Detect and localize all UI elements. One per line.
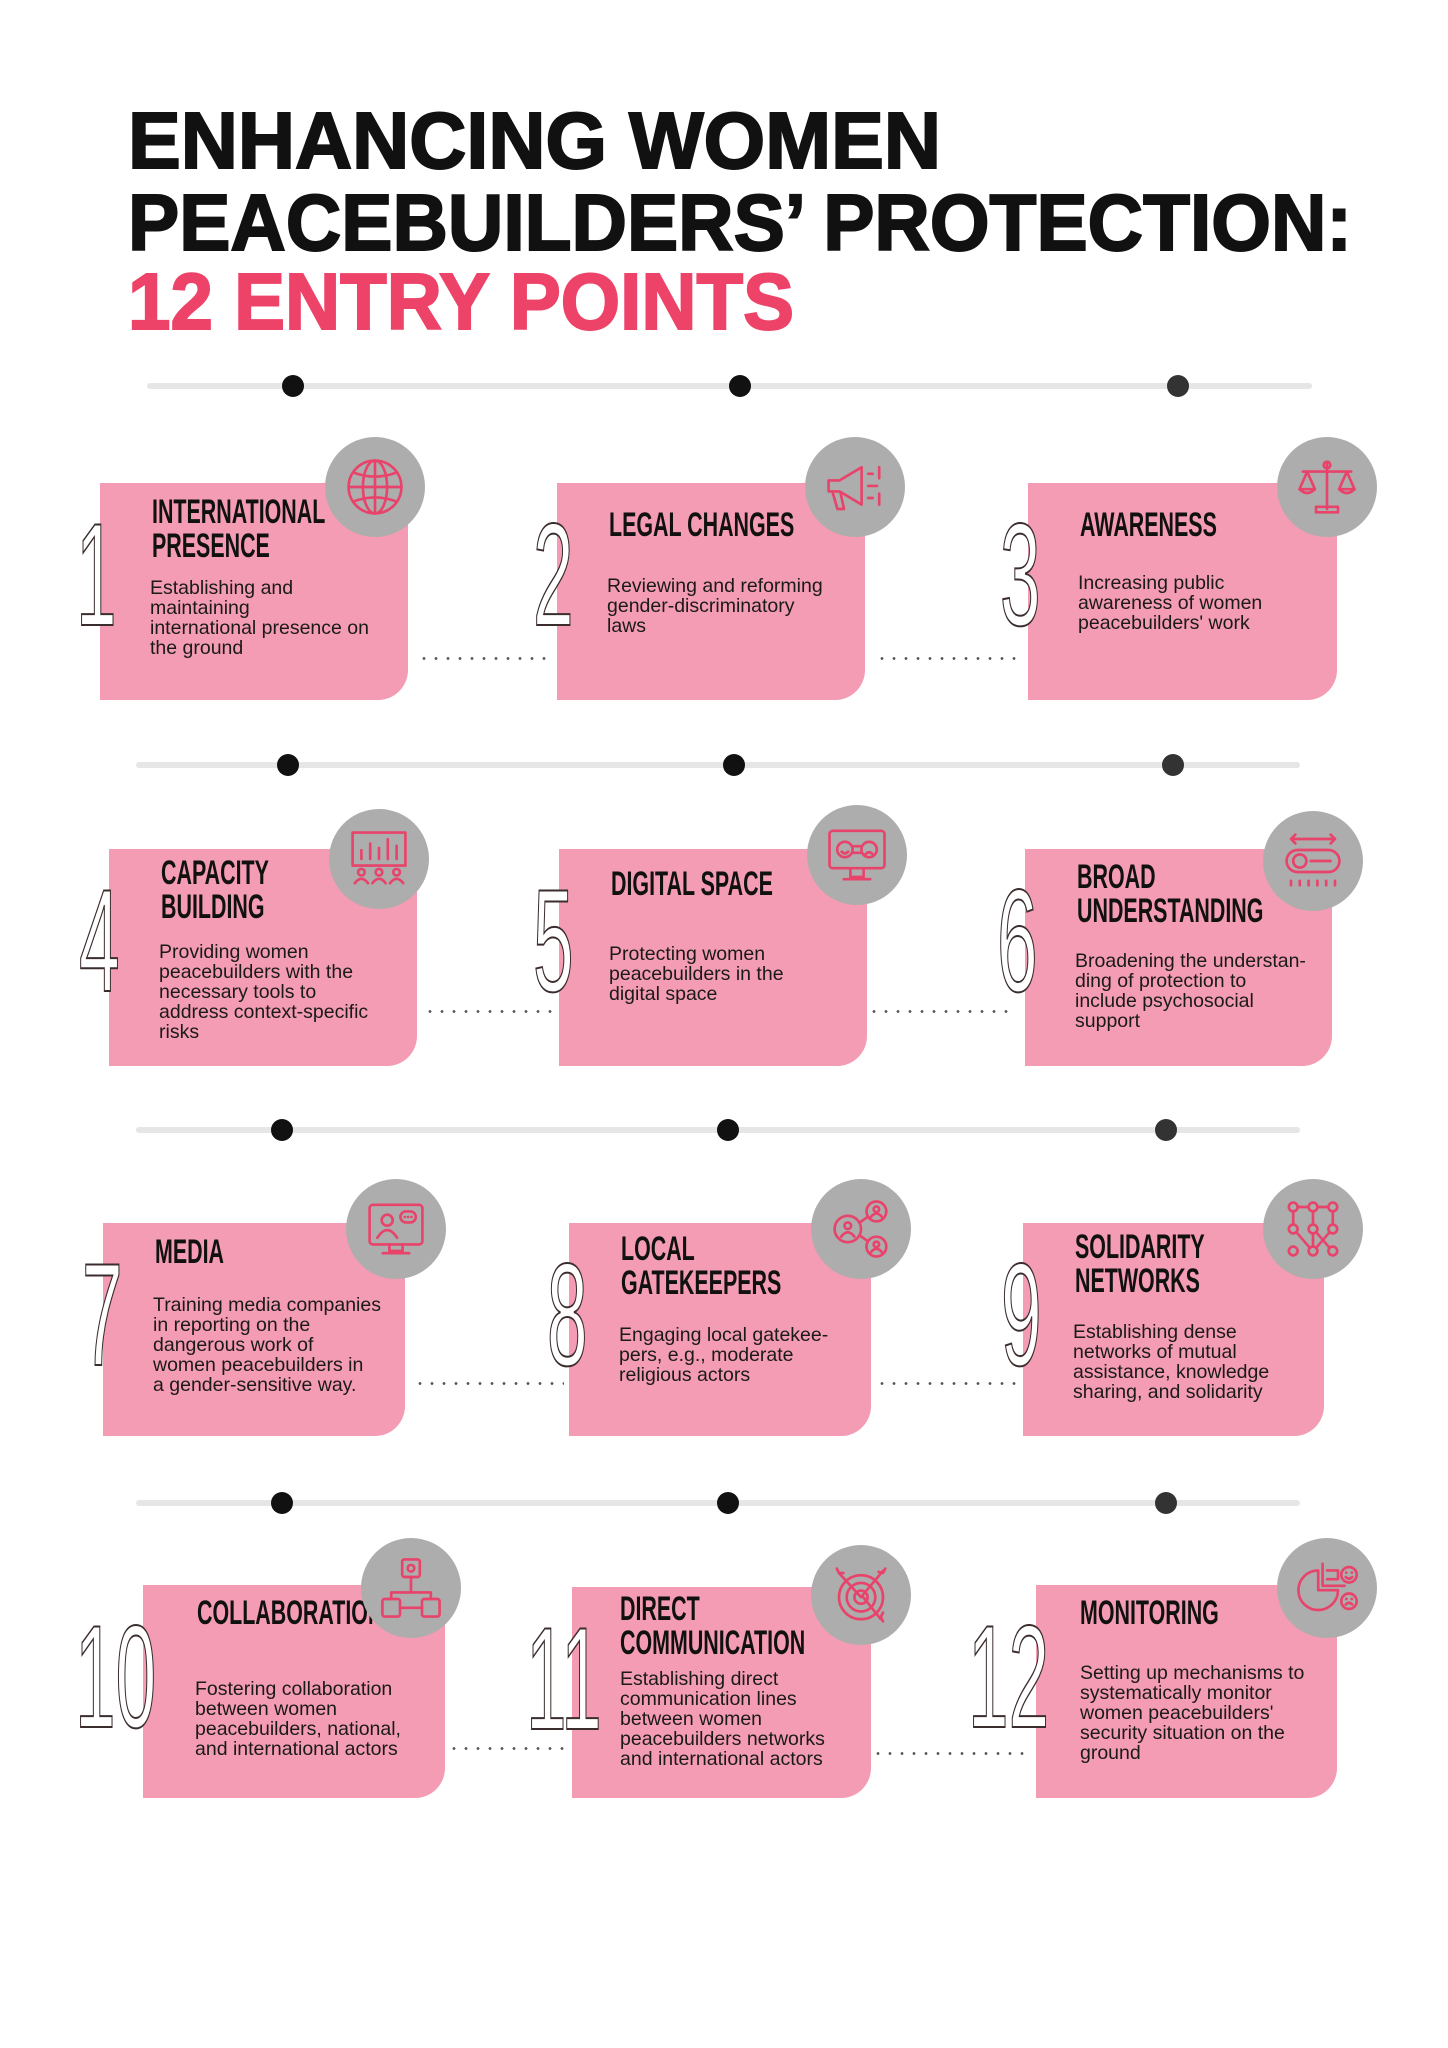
icon: collaboration diagram [361, 1538, 461, 1638]
card 7: media [82, 1179, 446, 1436]
heading: DIRECT [620, 1590, 700, 1628]
text: sharing, and solidarity [1073, 1381, 1263, 1403]
number 7: 7 [82, 1233, 123, 1396]
card 3: awareness [1000, 437, 1377, 700]
text: religious actors [619, 1364, 750, 1386]
text: maintaining [150, 597, 250, 619]
icon: toggle [1263, 811, 1363, 911]
text: peacebuilders' work [1078, 612, 1250, 634]
text: assistance, knowledge [1073, 1361, 1269, 1383]
number 12: 12 [968, 1595, 1049, 1758]
heading: LEGAL CHANGES [609, 506, 794, 544]
heading: DIGITAL SPACE [611, 865, 773, 903]
heading: INTERNATIONAL [152, 493, 325, 531]
icon: megaphone [805, 437, 905, 537]
title: ENHANCING WOMEN [128, 96, 941, 185]
heading [620, 1590, 805, 1662]
heading: AWARENESS [1080, 506, 1217, 544]
text: include psychosocial [1075, 990, 1254, 1012]
card 4: capacity building [79, 809, 429, 1066]
text: the ground [150, 637, 243, 659]
text: Establishing and [150, 577, 293, 599]
text [1075, 950, 1306, 1032]
card 9: solidarity networks [1001, 1179, 1363, 1436]
text: international presence on [150, 617, 369, 639]
text [1078, 572, 1262, 634]
text: Establishing dense [1073, 1321, 1237, 1343]
text: Establishing direct [620, 1668, 778, 1690]
number 10: 10 [75, 1595, 156, 1758]
icon: presentation [329, 809, 429, 909]
text: Increasing public [1078, 572, 1224, 594]
text: communication lines [620, 1688, 797, 1710]
text: laws [607, 615, 646, 637]
text: women peacebuilders in [153, 1354, 363, 1376]
text [607, 575, 823, 637]
text: awareness of women [1078, 592, 1262, 614]
card 8: local gatekeepers [547, 1179, 911, 1436]
text [619, 1324, 828, 1386]
number 2: 2 [533, 493, 574, 656]
number 5: 5 [533, 859, 574, 1022]
card 6: broad understanding [997, 811, 1363, 1066]
text [195, 1678, 401, 1760]
heading: COMMUNICATION [620, 1624, 805, 1662]
text: Engaging local gatekee- [619, 1324, 828, 1346]
text: Training media companies [153, 1294, 381, 1316]
text: peacebuilders with the [159, 961, 353, 983]
number 8: 8 [547, 1233, 588, 1396]
icon: scales [1277, 437, 1377, 537]
icon: people network [811, 1179, 911, 1279]
card 2: legal changes [533, 437, 905, 700]
text: and international actors [195, 1738, 398, 1760]
icon: media monitor [346, 1179, 446, 1279]
text: risks [159, 1021, 199, 1043]
heading: NETWORKS [1075, 1262, 1200, 1300]
card 12: monitoring [968, 1538, 1377, 1798]
number 6: 6 [997, 859, 1038, 1022]
heading [1077, 858, 1263, 930]
heading [621, 1230, 781, 1302]
title [128, 96, 1352, 346]
text: women peacebuilders' [1080, 1702, 1273, 1724]
text [1073, 1321, 1269, 1403]
text [150, 577, 369, 659]
heading: MEDIA [155, 1233, 224, 1271]
text: Broadening the understan- [1075, 950, 1306, 972]
text: a gender-sensitive way. [153, 1374, 356, 1396]
heading [1075, 1228, 1205, 1300]
text: and international actors [620, 1748, 823, 1770]
heading: PRESENCE [152, 527, 270, 565]
text [1080, 1662, 1304, 1764]
heading: BROAD [1077, 858, 1156, 896]
text: Providing women [159, 941, 309, 963]
text: necessary tools to [159, 981, 316, 1003]
number 11: 11 [526, 1597, 602, 1760]
text: Setting up mechanisms to [1080, 1662, 1304, 1684]
text: ground [1080, 1742, 1141, 1764]
text [609, 943, 784, 1005]
title: PEACEBUILDERS’ PROTECTION: [128, 178, 1352, 267]
heading: BUILDING [161, 888, 265, 926]
text: systematically monitor [1080, 1682, 1272, 1704]
text: between women [620, 1708, 762, 1730]
heading: UNDERSTANDING [1077, 892, 1263, 930]
text: ding of protection to [1075, 970, 1246, 992]
text: peacebuilders networks [620, 1728, 825, 1750]
text [620, 1668, 825, 1770]
text: pers, e.g., moderate [619, 1344, 794, 1366]
number 4: 4 [79, 859, 120, 1022]
heading: COLLABORATION [197, 1594, 383, 1632]
text: Reviewing and reforming [607, 575, 823, 597]
heading: GATEKEEPERS [621, 1264, 781, 1302]
text [153, 1294, 381, 1396]
card 10: collaboration [75, 1538, 461, 1798]
text: Protecting women [609, 943, 765, 965]
text: address context-specific [159, 1001, 368, 1023]
icon: network nodes [1263, 1179, 1363, 1279]
text: Fostering collaboration [195, 1678, 392, 1700]
text: gender-discriminatory [607, 595, 794, 617]
card 1: international presence [76, 437, 425, 700]
text: peacebuilders, national, [195, 1718, 401, 1740]
card 5: digital space [533, 805, 907, 1066]
heading [161, 854, 269, 926]
number 1: 1 [76, 493, 117, 656]
icon: target [811, 1545, 911, 1645]
text: support [1075, 1010, 1140, 1032]
text [159, 941, 368, 1043]
text: security situation on the [1080, 1722, 1285, 1744]
text: in reporting on the [153, 1314, 310, 1336]
heading [152, 493, 325, 565]
icon: pie chart with faces [1277, 1538, 1377, 1638]
number 3: 3 [1000, 493, 1041, 656]
heading: CAPACITY [161, 854, 269, 892]
heading: SOLIDARITY [1075, 1228, 1205, 1266]
text: dangerous work of [153, 1334, 313, 1356]
title: 12 ENTRY POINTS [128, 257, 794, 346]
card 11: direct communication [526, 1545, 911, 1798]
heading: MONITORING [1080, 1594, 1219, 1632]
icon: globe [325, 437, 425, 537]
text: digital space [609, 983, 717, 1005]
number 9: 9 [1001, 1233, 1042, 1396]
text: peacebuilders in the [609, 963, 784, 985]
heading: LOCAL [621, 1230, 695, 1268]
text: networks of mutual [1073, 1341, 1237, 1363]
icon: monitor with faces [807, 805, 907, 905]
text: between women [195, 1698, 337, 1720]
